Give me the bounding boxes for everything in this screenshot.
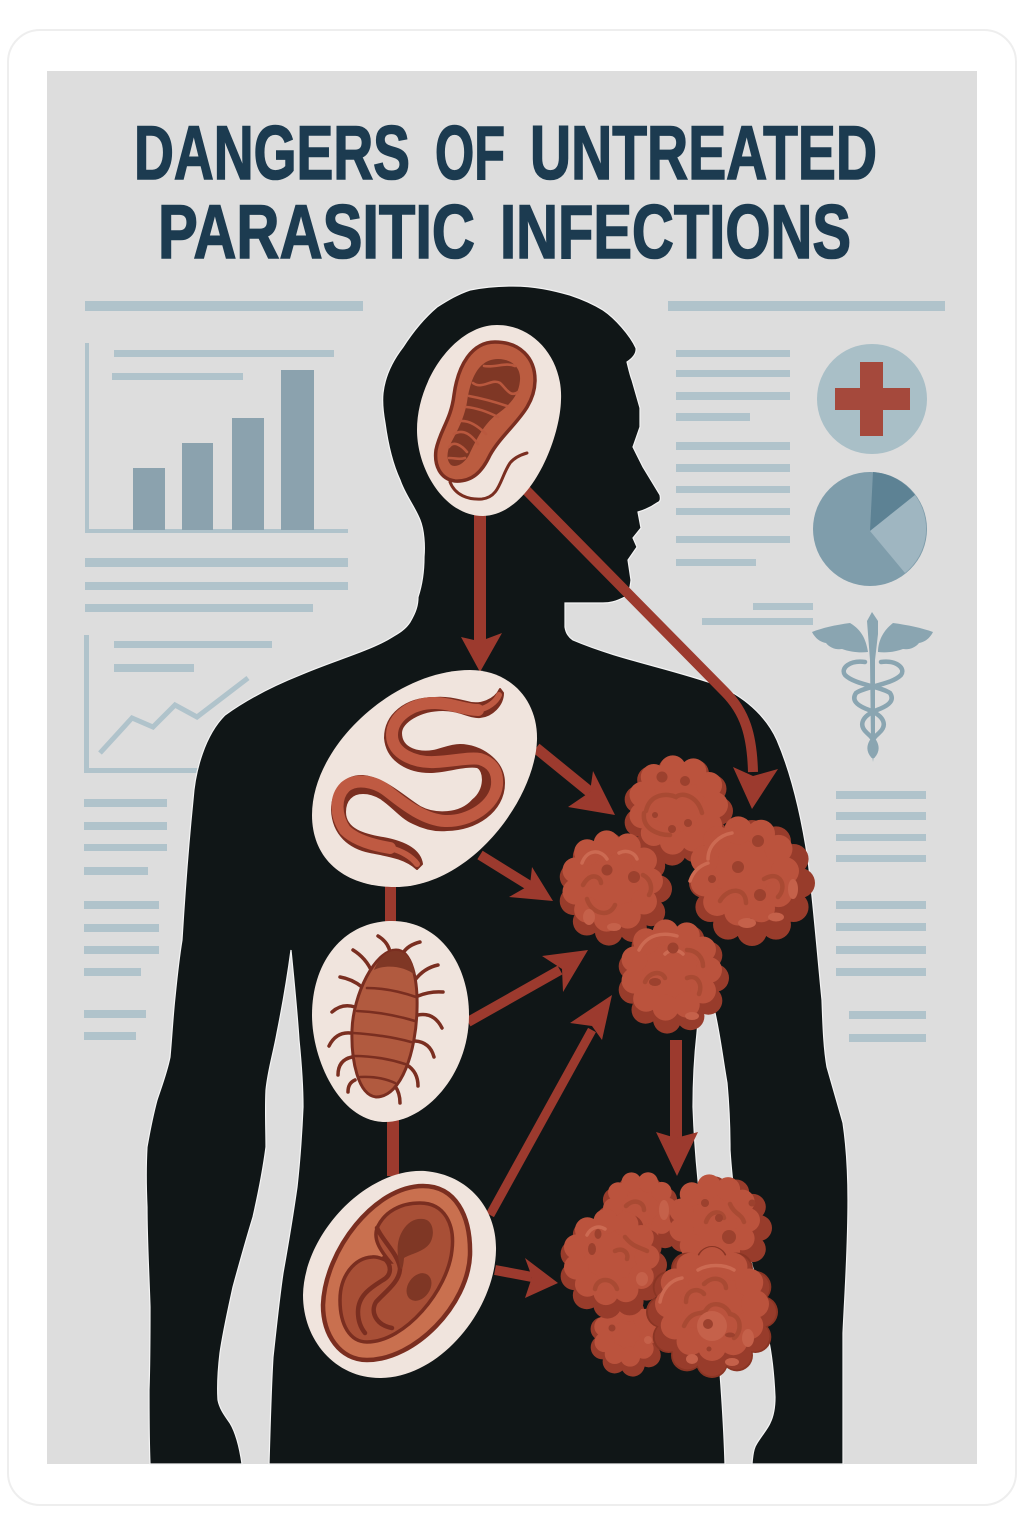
text lines lower left	[84, 799, 167, 1040]
tumour: left	[572, 843, 658, 932]
title	[134, 111, 877, 275]
lower tumour cluster	[573, 1181, 762, 1366]
louse segments	[353, 988, 416, 1083]
title: PARASITIC	[158, 190, 475, 275]
icon: pie chart	[813, 472, 927, 586]
tumour: right	[690, 830, 800, 931]
panel: left background data	[84, 301, 363, 1040]
arrows and connectors	[385, 490, 778, 1298]
louse body	[352, 950, 417, 1097]
organism body	[436, 342, 535, 481]
icon: medical cross	[817, 344, 927, 454]
parasite panel: cyst	[303, 1171, 496, 1378]
arrow: louse to tumour	[468, 950, 588, 1022]
tumour: cluster front	[660, 1261, 762, 1366]
bar chart	[85, 343, 348, 533]
title: DANGERS	[134, 111, 410, 196]
interior wave lines	[449, 365, 518, 459]
arrow: head to shoulder tumour	[526, 490, 778, 809]
line chart	[84, 635, 272, 773]
tumour: cluster left	[573, 1221, 653, 1305]
text lines lower right	[836, 791, 926, 1042]
arrow: cyst to lower cluster	[495, 1258, 558, 1298]
cyst outer wall	[323, 1186, 470, 1360]
worm body	[332, 689, 504, 869]
worm inner band	[338, 703, 497, 848]
organism tail	[450, 453, 527, 499]
organism interior	[448, 359, 520, 466]
title: UNTREATED	[530, 111, 877, 196]
arrow: worm to left tumour	[480, 855, 553, 901]
icon: caduceus	[812, 612, 933, 762]
text lines upper right	[676, 350, 813, 625]
parasite panel: louse	[312, 921, 469, 1122]
arrow: tumour to lower cluster	[656, 1040, 698, 1176]
title: OF	[435, 111, 505, 196]
worm tips	[390, 695, 499, 864]
connector: worm to louse	[385, 880, 396, 925]
tumour: cluster right top	[680, 1186, 759, 1267]
tumour: cluster bottom	[601, 1311, 655, 1365]
cyst folds	[358, 1228, 400, 1333]
title: INFECTIONS	[500, 190, 851, 275]
panel: right background data	[668, 301, 945, 1042]
connector: louse to cyst	[387, 1118, 399, 1176]
human silhouette	[146, 286, 848, 1464]
parasite panel: brain	[417, 325, 561, 516]
text lines under bar chart	[85, 558, 348, 612]
tumour: upper	[637, 768, 719, 852]
louse head cap	[374, 951, 415, 975]
arrow: worm to upper tumour	[536, 748, 615, 815]
cyst inner body	[340, 1203, 453, 1342]
arrow: head to chest	[461, 512, 502, 672]
tumour: cluster back top	[609, 1181, 671, 1249]
cyst small nucleus	[401, 1268, 437, 1306]
arrow: cyst to tumour	[490, 995, 612, 1215]
tumour: lower	[631, 932, 715, 1020]
cyst nucleus	[398, 1219, 433, 1269]
parasite panel: worm	[312, 670, 537, 887]
louse legs	[329, 936, 443, 1103]
